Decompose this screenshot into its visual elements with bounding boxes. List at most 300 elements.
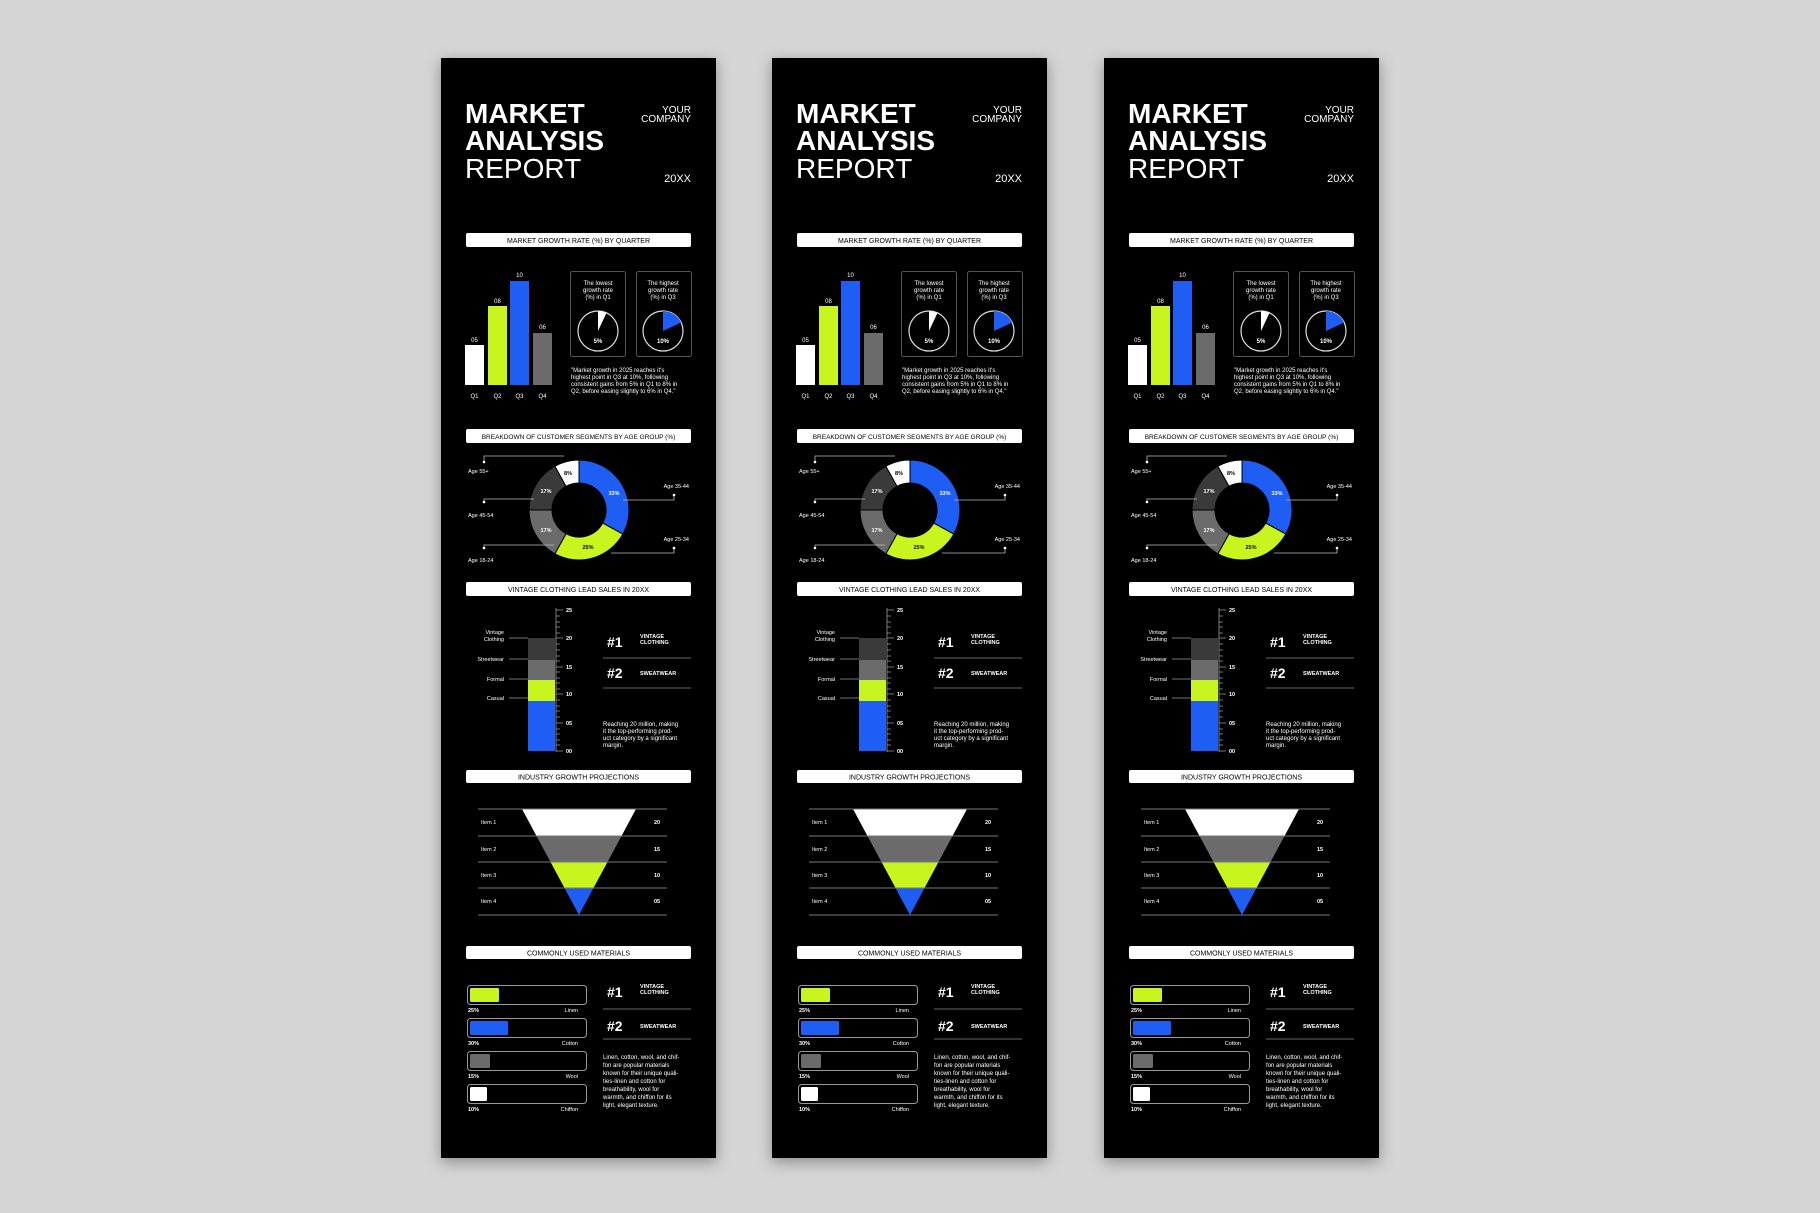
donut chart: [1192, 460, 1292, 560]
funnel chart: 10: [985, 873, 991, 879]
heading: segments: [797, 429, 1022, 443]
heading: growth: MARKET GROWTH RATE (%) BY QUARTER: [838, 238, 981, 245]
donut labels: [540, 471, 620, 551]
funnel chart: [809, 809, 998, 915]
quote: Q2, before easing slightly to 6% in Q4.": [571, 389, 676, 395]
heading: projections: INDUSTRY GROWTH PROJECTIONS: [1181, 774, 1302, 782]
heading: materials: COMMONLY USED MATERIALS: [527, 950, 630, 958]
donut labels: [871, 471, 951, 551]
stacked bar: 20: [897, 636, 903, 642]
ranking: materials: light, elegant texture.: [603, 1103, 659, 1109]
heading: sales: [797, 582, 1022, 596]
materials bars: 15%: [799, 1074, 810, 1080]
stacked bar: 00: [1229, 749, 1235, 755]
bar chart: [1128, 273, 1215, 400]
company: 20XX: [995, 173, 1023, 185]
donut labels: 17%: [1203, 489, 1215, 495]
ranking: sales: it the top-performing prod-: [934, 729, 1003, 735]
donut callouts: [468, 456, 689, 564]
donut labels: 17%: [871, 528, 883, 534]
quote: [902, 368, 1008, 395]
heading: materials: [1129, 946, 1354, 959]
panel: report 1: [441, 58, 716, 1158]
title: ANALYSIS: [796, 125, 935, 156]
ranking: materials: warmth, and chiffon for its: [933, 1095, 1003, 1101]
ranking: materials: [933, 984, 1022, 1109]
funnel chart: Item 3: [481, 873, 496, 879]
quote: Q2, before easing slightly to 6% in Q4.": [1234, 389, 1339, 395]
card: lowest: The lowest: [583, 281, 613, 287]
stacked bar: 05: [897, 721, 903, 727]
quote: "Market growth in 2025 reaches it's: [902, 368, 995, 374]
donut labels: 25%: [1245, 545, 1257, 551]
bar chart: 06: [870, 325, 877, 331]
panel: report 3: [1104, 58, 1379, 1158]
ranking: materials: CLOTHING: [971, 990, 1000, 996]
funnel chart: 20: [985, 820, 991, 826]
heading: segments: [1129, 429, 1354, 443]
materials bars: 25%: [799, 1008, 810, 1014]
ranking: sales: Reaching 20 million, making: [934, 722, 1009, 728]
ranking: sales: margin.: [1266, 743, 1286, 749]
stacked bar: 05: [566, 721, 572, 727]
ranking: sales: margin.: [934, 743, 954, 749]
heading: growth: MARKET GROWTH RATE (%) BY QUARTER: [1170, 238, 1313, 245]
donut callouts: Age 25-34: [1327, 537, 1352, 543]
materials bars: 10%: [468, 1107, 479, 1113]
heading: projections: INDUSTRY GROWTH PROJECTIONS: [518, 774, 639, 782]
materials bars: 15%: [1131, 1074, 1142, 1080]
ranking: materials: ties-linen and cotton for: [1266, 1079, 1328, 1085]
stacked bar: 15: [566, 665, 572, 671]
donut labels: 33%: [1271, 491, 1283, 497]
ranking: materials: fon are popular materials: [1266, 1063, 1332, 1069]
bar chart: Q2: [493, 394, 502, 400]
title: ANALYSIS: [465, 125, 604, 156]
ranking: materials: fon are popular materials: [934, 1063, 1000, 1069]
title: REPORT: [465, 153, 581, 184]
heading: growth: MARKET GROWTH RATE (%) BY QUARTER: [507, 238, 650, 245]
donut labels: 25%: [913, 545, 925, 551]
ranking: materials: Linen, cotton, wool, and chif-: [603, 1055, 679, 1061]
ranking: sales: uct category by a significant: [934, 736, 1008, 742]
title: REPORT: [1128, 153, 1244, 184]
quote: consistent gains from 5% in Q1 to 8% in: [902, 382, 1008, 388]
ranking: materials: #2: [1270, 1018, 1286, 1034]
bar chart: 10: [516, 273, 523, 279]
materials bars: Cotton: [1225, 1041, 1241, 1047]
ranking: materials: [602, 984, 691, 1109]
quote: highest point in Q3 at 10%, following: [571, 375, 668, 381]
donut labels: 33%: [939, 491, 951, 497]
ranking: sales: #2: [1270, 665, 1286, 681]
funnel chart: Item 4: [481, 899, 496, 905]
stacked bar: 00: [897, 749, 903, 755]
heading: sales: VINTAGE CLOTHING LEAD SALES IN 20XX: [839, 587, 980, 594]
stacked bar: Clothing: [815, 637, 835, 643]
title: MARKET: [1128, 98, 1248, 129]
ranking: materials: light, elegant texture.: [1266, 1103, 1322, 1109]
donut callouts: Age 25-34: [664, 537, 689, 543]
company: 20XX: [664, 173, 692, 185]
materials bars: 30%: [799, 1041, 810, 1047]
card: highest: (%) in Q3: [1313, 295, 1339, 301]
donut callouts: Age 18-24: [1131, 558, 1156, 564]
materials bars: Linen: [1228, 1008, 1241, 1014]
bar chart: 10: [1179, 273, 1186, 279]
ranking: materials: #1: [1270, 984, 1286, 1000]
heading: projections: [1129, 770, 1354, 783]
card: lowest: (%) in Q1: [1248, 295, 1274, 301]
ranking: sales: Reaching 20 million, making: [1266, 722, 1341, 728]
stacked bar: 10: [897, 692, 903, 698]
donut labels: 17%: [871, 489, 883, 495]
company: YOUR: [993, 105, 1022, 116]
bar chart: 10: [847, 273, 854, 279]
card: highest: The highest: [647, 281, 679, 287]
donut callouts: Age 35-44: [1327, 484, 1352, 490]
donut callouts: Age 45-54: [468, 513, 493, 519]
card: highest: growth rate: [979, 288, 1010, 294]
ranking: materials: VINTAGE: [640, 984, 664, 990]
ranking: sales: uct category by a significant: [1266, 736, 1340, 742]
card: lowest: growth rate: [583, 288, 614, 294]
materials bars: Wool: [566, 1074, 578, 1080]
materials bars: [468, 986, 586, 1113]
donut labels: 25%: [582, 545, 594, 551]
title: [465, 98, 604, 184]
card: highest: 10%: [657, 339, 670, 345]
company: COMPANY: [1304, 114, 1354, 125]
funnel chart: 15: [985, 847, 991, 853]
materials bars: Linen: [896, 1008, 909, 1014]
stacked bar: Vintage: [485, 630, 504, 636]
ranking: materials: known for their unique quali-: [1266, 1071, 1341, 1077]
ranking: sales: [603, 634, 691, 749]
donut callouts: Age 55+: [468, 469, 489, 475]
bar chart: Q3: [1178, 394, 1187, 400]
stacked bar: [1140, 608, 1235, 755]
funnel chart: 05: [1317, 899, 1323, 905]
donut labels: 8%: [895, 471, 903, 477]
stacked bar: Streetwear: [1140, 657, 1167, 663]
quote: Q2, before easing slightly to 6% in Q4.": [902, 389, 1007, 395]
materials bars: Chiffon: [1224, 1107, 1241, 1113]
stacked bar: 20: [1229, 636, 1235, 642]
ranking: sales: CLOTHING: [1303, 640, 1332, 646]
funnel chart: Item 4: [812, 899, 827, 905]
donut chart: [529, 460, 629, 560]
card: lowest: growth rate: [914, 288, 945, 294]
company: [641, 105, 692, 185]
materials bars: Cotton: [893, 1041, 909, 1047]
donut callouts: Age 18-24: [799, 558, 824, 564]
bar chart: 08: [825, 299, 832, 305]
card: lowest: [1234, 272, 1288, 356]
materials bars: Wool: [897, 1074, 909, 1080]
ranking: sales: [934, 634, 1022, 749]
ranking: materials: #2: [938, 1018, 954, 1034]
funnel chart: 15: [654, 847, 660, 853]
donut callouts: Age 45-54: [799, 513, 824, 519]
ranking: materials: known for their unique quali-: [934, 1071, 1009, 1077]
donut callouts: Age 55+: [1131, 469, 1152, 475]
stacked bar: Vintage: [1148, 630, 1167, 636]
ranking: materials: #2: [607, 1018, 623, 1034]
stacked bar: 15: [897, 665, 903, 671]
materials bars: Chiffon: [561, 1107, 578, 1113]
funnel chart: Item 2: [481, 847, 496, 853]
bar chart: 08: [494, 299, 501, 305]
ranking: sales: #2: [938, 665, 954, 681]
ranking: materials: warmth, and chiffon for its: [1265, 1095, 1335, 1101]
funnel chart: 15: [1317, 847, 1323, 853]
ranking: sales: #1: [1270, 634, 1286, 650]
title: MARKET: [796, 98, 916, 129]
bar chart: 08: [1157, 299, 1164, 305]
quote: consistent gains from 5% in Q1 to 8% in: [571, 382, 677, 388]
materials bars: Wool: [1229, 1074, 1241, 1080]
heading: materials: [466, 946, 691, 959]
stacked bar: Clothing: [484, 637, 504, 643]
company: 20XX: [1327, 173, 1355, 185]
ranking: materials: SWEATWEAR: [971, 1024, 1007, 1030]
bar chart: Q4: [1201, 394, 1210, 400]
ranking: sales: #1: [938, 634, 954, 650]
stacked bar: Formal: [818, 677, 835, 683]
materials bars: 10%: [799, 1107, 810, 1113]
funnel chart: Item 3: [812, 873, 827, 879]
heading: projections: [797, 770, 1022, 783]
ranking: materials: fon are popular materials: [603, 1063, 669, 1069]
ranking: sales: SWEATWEAR: [971, 671, 1007, 677]
card: highest: (%) in Q3: [981, 295, 1007, 301]
funnel chart: Item 1: [481, 820, 496, 826]
ranking: sales: SWEATWEAR: [1303, 671, 1339, 677]
ranking: sales: CLOTHING: [640, 640, 669, 646]
quote: highest point in Q3 at 10%, following: [1234, 375, 1331, 381]
funnel chart: 20: [654, 820, 660, 826]
stacked bar: 25: [566, 608, 572, 614]
card: lowest: The lowest: [914, 281, 944, 287]
company: COMPANY: [641, 114, 691, 125]
company: COMPANY: [972, 114, 1022, 125]
title: REPORT: [796, 153, 912, 184]
stacked bar: 25: [1229, 608, 1235, 614]
stacked bar: 25: [897, 608, 903, 614]
ranking: materials: CLOTHING: [1303, 990, 1332, 996]
ranking: materials: Linen, cotton, wool, and chif-: [1266, 1055, 1342, 1061]
heading: projections: INDUSTRY GROWTH PROJECTIONS: [849, 774, 970, 782]
bar chart: Q1: [1133, 394, 1142, 400]
quote: [571, 368, 677, 395]
ranking: sales: uct category by a significant: [603, 736, 677, 742]
donut callouts: [1131, 456, 1352, 564]
ranking: materials: breathability, wool for: [1266, 1087, 1322, 1093]
bar chart: 06: [1202, 325, 1209, 331]
funnel chart: [1141, 809, 1330, 915]
ranking: sales: Reaching 20 million, making: [603, 722, 678, 728]
bar chart: 06: [539, 325, 546, 331]
donut chart: [860, 460, 960, 560]
card: lowest: (%) in Q1: [916, 295, 942, 301]
company: [1304, 105, 1355, 185]
ranking: sales: #1: [607, 634, 623, 650]
stacked bar: [808, 608, 903, 755]
heading: segments: BREAKDOWN OF CUSTOMER SEGMENTS BY AGE GROUP (%): [813, 434, 1006, 441]
donut callouts: Age 18-24: [468, 558, 493, 564]
ranking: materials: #1: [938, 984, 954, 1000]
materials bars: Chiffon: [892, 1107, 909, 1113]
panel: report 2: [772, 58, 1047, 1158]
heading: segments: BREAKDOWN OF CUSTOMER SEGMENTS BY AGE GROUP (%): [1145, 434, 1338, 441]
donut callouts: Age 25-34: [995, 537, 1020, 543]
card: highest: growth rate: [1311, 288, 1342, 294]
card: lowest: 5%: [594, 339, 603, 345]
ranking: sales: it the top-performing prod-: [1266, 729, 1335, 735]
stacked bar: [477, 608, 572, 755]
donut labels: 17%: [540, 489, 552, 495]
card: lowest: [570, 272, 626, 356]
funnel chart: 05: [654, 899, 660, 905]
ranking: sales: VINTAGE: [971, 634, 995, 640]
funnel chart: 10: [1317, 873, 1323, 879]
donut callouts: Age 55+: [799, 469, 820, 475]
bar chart: Q1: [801, 394, 810, 400]
company: YOUR: [662, 105, 691, 116]
bar chart: [465, 273, 552, 400]
funnel chart: 20: [1317, 820, 1323, 826]
ranking: sales: VINTAGE: [640, 634, 664, 640]
ranking: materials: SWEATWEAR: [1303, 1024, 1339, 1030]
heading: materials: [797, 946, 1022, 959]
quote: "Market growth in 2025 reaches it's: [571, 368, 664, 374]
bar chart: [796, 273, 883, 400]
bar chart: Q4: [538, 394, 547, 400]
bar chart: 05: [471, 338, 478, 344]
funnel chart: Item 2: [1144, 847, 1159, 853]
card: highest: 10%: [988, 339, 1001, 345]
materials bars: Cotton: [562, 1041, 578, 1047]
stacked bar: Formal: [1150, 677, 1167, 683]
donut callouts: Age 45-54: [1131, 513, 1156, 519]
card: highest: [636, 272, 692, 356]
quote: consistent gains from 5% in Q1 to 8% in: [1234, 382, 1340, 388]
ranking: sales: [1266, 634, 1354, 749]
ranking: materials: #1: [607, 984, 623, 1000]
heading: segments: [466, 429, 691, 443]
donut labels: 17%: [1203, 528, 1215, 534]
stacked bar: Formal: [487, 677, 504, 683]
ranking: sales: #2: [607, 665, 623, 681]
funnel chart: 05: [985, 899, 991, 905]
card: highest: 10%: [1320, 339, 1333, 345]
title: ANALYSIS: [1128, 125, 1267, 156]
ranking: sales: it the top-performing prod-: [603, 729, 672, 735]
stacked bar: 20: [566, 636, 572, 642]
donut labels: 8%: [564, 471, 572, 477]
quote: highest point in Q3 at 10%, following: [902, 375, 999, 381]
funnel chart: Item 3: [1144, 873, 1159, 879]
bar chart: 05: [1134, 338, 1141, 344]
bar chart: 05: [802, 338, 809, 344]
ranking: materials: Linen, cotton, wool, and chif-: [934, 1055, 1010, 1061]
stacked bar: 00: [566, 749, 572, 755]
funnel chart: Item 2: [812, 847, 827, 853]
stacked bar: 10: [1229, 692, 1235, 698]
card: lowest: growth rate: [1246, 288, 1277, 294]
heading: segments: BREAKDOWN OF CUSTOMER SEGMENTS BY AGE GROUP (%): [482, 434, 675, 441]
stacked bar: Casual: [818, 696, 835, 702]
donut labels: 8%: [1227, 471, 1235, 477]
materials bars: 30%: [1131, 1041, 1142, 1047]
donut labels: 33%: [608, 491, 620, 497]
funnel chart: Item 1: [812, 820, 827, 826]
heading: projections: [466, 770, 691, 783]
heading: growth: [466, 233, 691, 247]
heading: sales: [1129, 582, 1354, 596]
stacked bar: Streetwear: [808, 657, 835, 663]
company: [972, 105, 1023, 185]
donut callouts: Age 35-44: [664, 484, 689, 490]
stacked bar: Clothing: [1147, 637, 1167, 643]
donut callouts: [799, 456, 1020, 564]
stacked bar: 05: [1229, 721, 1235, 727]
bar chart: Q2: [824, 394, 833, 400]
stacked bar: 15: [1229, 665, 1235, 671]
ranking: materials: breathability, wool for: [934, 1087, 990, 1093]
ranking: materials: warmth, and chiffon for its: [602, 1095, 672, 1101]
bar chart: Q4: [869, 394, 878, 400]
card: highest: growth rate: [648, 288, 679, 294]
card: highest: [968, 272, 1022, 356]
materials bars: 30%: [468, 1041, 479, 1047]
card: highest: (%) in Q3: [650, 295, 676, 301]
ranking: materials: ties-linen and cotton for: [934, 1079, 996, 1085]
stacked bar: Streetwear: [477, 657, 504, 663]
stacked bar: 10: [566, 692, 572, 698]
ranking: sales: CLOTHING: [971, 640, 1000, 646]
card: lowest: [902, 272, 956, 356]
ranking: materials: CLOTHING: [640, 990, 669, 996]
heading: sales: [466, 582, 691, 596]
ranking: materials: SWEATWEAR: [640, 1024, 676, 1030]
donut labels: 17%: [540, 528, 552, 534]
card: lowest: (%) in Q1: [585, 295, 611, 301]
bar chart: Q2: [1156, 394, 1165, 400]
heading: growth: [1129, 233, 1354, 247]
title: [1128, 98, 1267, 184]
stacked bar: Casual: [487, 696, 504, 702]
stacked bar: Vintage: [816, 630, 835, 636]
donut labels: [1203, 471, 1283, 551]
heading: growth: [797, 233, 1022, 247]
heading: materials: COMMONLY USED MATERIALS: [1190, 950, 1293, 958]
card: lowest: 5%: [925, 339, 934, 345]
materials bars: [798, 986, 918, 1113]
materials bars: 25%: [1131, 1008, 1142, 1014]
funnel chart: Item 1: [1144, 820, 1159, 826]
heading: materials: COMMONLY USED MATERIALS: [858, 950, 961, 958]
ranking: materials: [1265, 984, 1354, 1109]
ranking: sales: SWEATWEAR: [640, 671, 676, 677]
bar chart: Q1: [470, 394, 479, 400]
heading: sales: VINTAGE CLOTHING LEAD SALES IN 20XX: [1171, 587, 1312, 594]
materials bars: Linen: [565, 1008, 578, 1014]
company: YOUR: [1325, 105, 1354, 116]
materials bars: 25%: [468, 1008, 479, 1014]
stacked bar: Casual: [1150, 696, 1167, 702]
